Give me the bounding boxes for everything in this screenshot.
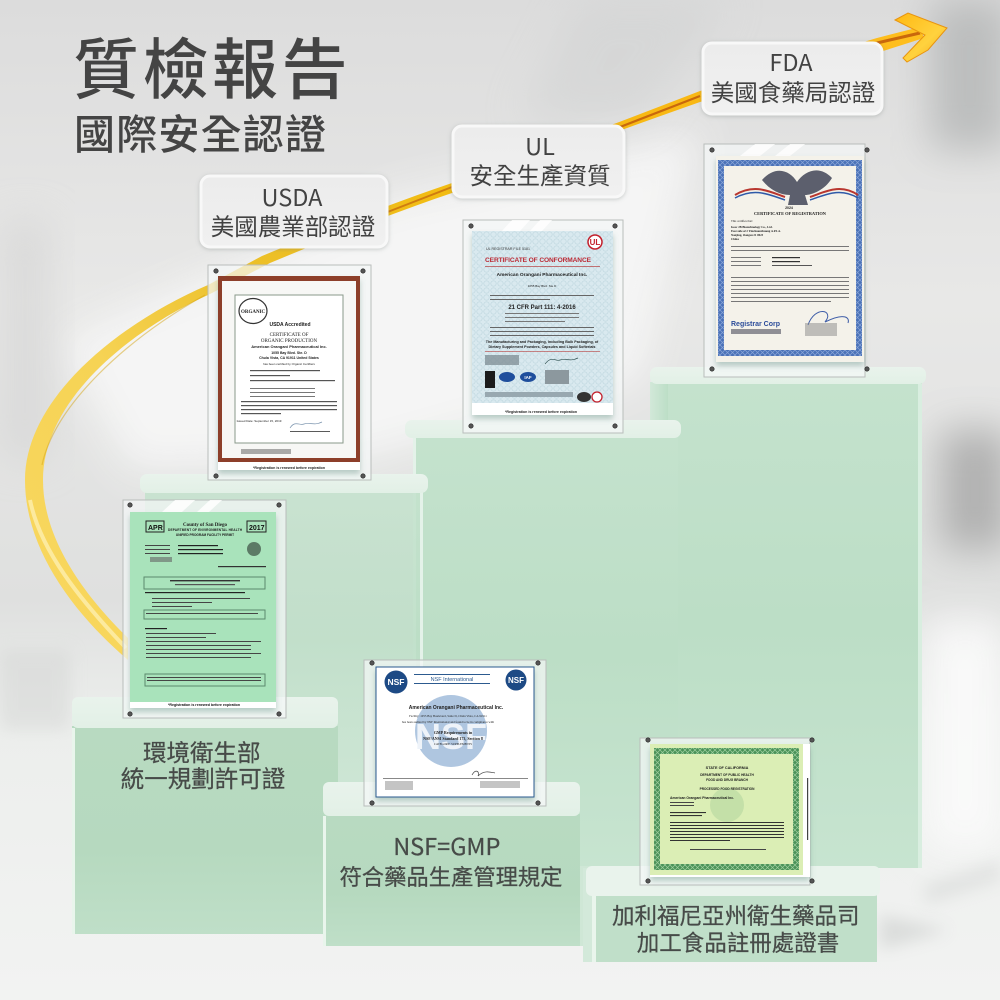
icon: accreditation seals [485, 370, 602, 402]
certificate: NSF GMP: Facility: 1055 Bay Boulevard, Suite D, Chula Vista, CA 91911 [409, 714, 487, 719]
label: USDA: USDA [262, 179, 323, 213]
icon: NSF watermark [415, 695, 487, 767]
certificate: NSF GMP: GMP Requirements in [434, 730, 473, 735]
icon: NSF logo left [384, 670, 408, 694]
label: UL: 安全生產資質 [470, 157, 610, 191]
icon: NSF logo right [506, 670, 526, 690]
certificate: NSF GMP: has been audited by NSF International and found to be in compliance with [402, 720, 495, 724]
certificate: UL: The Manufacturing and Packaging, Including Bulk Packaging, of [486, 340, 599, 344]
label: UL [453, 126, 624, 197]
certificate: FDA registration: Isosc JB Biotechnology Co., Ltd. [731, 225, 773, 229]
icon: NSF watermark: NSF [415, 716, 487, 757]
certificate: UL: Dietary Supplement Powders, Capsules and Liquid Softerials [489, 345, 595, 349]
icon: UL mark: UL [590, 238, 600, 247]
certificate: California food registration: FOOD AND DRUG BRANCH [706, 778, 749, 782]
certificate: NSF GMP: American Orangani Pharmaceutical Inc. [409, 705, 504, 711]
certificate: UL: UL REGISTRAR FILE 5181 [486, 247, 530, 251]
certificate: environmental health permit: County of San Diego [183, 523, 228, 528]
label: FDA [703, 43, 882, 114]
label: USDA: 美國農業部認證 [211, 208, 375, 242]
icon: eagle [735, 170, 858, 205]
label: FDA: 美國食藥局認證 [711, 74, 875, 108]
certificate: USDA organic: 1055 Bay Blvd. Ste. D [271, 351, 307, 355]
certificate: California food registration [640, 738, 810, 885]
certificate: environmental health permit: 2017 [249, 525, 265, 532]
certificate: environmental health permit: DEPARTMENT OF ENVIRONMENTAL HEALTH [168, 528, 243, 532]
golden growth arrow [25, 13, 947, 660]
pedestal: FDA [650, 367, 926, 868]
certificate: FDA registration: Registrar Corp [731, 321, 780, 328]
certificate: FDA registration: CERTIFICATE OF REGISTRATION [754, 211, 827, 216]
certificate: California food registration: STATE OF CALIFORNIA [706, 766, 749, 770]
pedestal: environmental permit [72, 697, 338, 934]
certificate: UL: American Orangani Pharmaceutical Inc. [497, 272, 587, 278]
certificate: FDA registration [704, 144, 865, 377]
certificate: UL [463, 220, 623, 433]
pedestal text: environmental permit: 環境衛生部 [143, 734, 261, 768]
title: 質檢報告 [73, 17, 351, 113]
certificate: USDA organic: has been certified by Organic Certifiers [263, 362, 315, 366]
certificate: FDA registration: 2024 [785, 206, 793, 210]
pedestal text: environmental permit: 統一規劃許可證 [121, 760, 285, 794]
pedestal: UL [405, 420, 681, 946]
mounting screws [128, 148, 869, 883]
certificate: UL: 1055 Bay Blvd. Ste D [528, 284, 557, 288]
certificate: California food registration: PROCESSED FOOD REGISTRATION [700, 787, 755, 791]
icon: organic seal [239, 298, 267, 324]
certificate: California food registration: DEPARTMENT OF PUBLIC HEALTH [700, 773, 754, 777]
certificate: FDA registration: This certifies that: [731, 219, 753, 223]
certificate: USDA organic [208, 265, 371, 480]
certificate: NSF GMP: NSF/ANSI Standard 173, Section 8 [423, 736, 483, 741]
label: FDA: FDA [769, 44, 813, 78]
certificate: NSF GMP: CATEGORY: SUPPLEMENTS [434, 742, 472, 746]
icon: NSF logo right: NSF [508, 676, 524, 685]
icon: UL mark [588, 235, 602, 249]
icon: NSF logo left: NSF [388, 677, 404, 687]
pedestal text: California: 加工食品註冊處證書 [637, 926, 839, 958]
pedestal text: California: 加利福尼亞州衛生藥品司 [612, 899, 860, 931]
certificate: USDA organic: ORGANIC PRODUCTION [261, 339, 318, 344]
certificate: NSF GMP [364, 660, 546, 806]
certificate: UL: *Registration is renewed before expiration [505, 410, 577, 414]
certificate: environmental health permit: APR [148, 525, 163, 532]
certificate: USDA organic: *Registration is renewed before expiration [253, 466, 325, 470]
certificate: environmental health permit: *Registration is renewed before expiration [168, 703, 240, 707]
certificate: UL: 21 CFR Part 111: 4-2016 [508, 305, 576, 311]
certificate: USDA organic: Chula Vista, CA 91911 United States [259, 356, 319, 360]
label: UL: UL [525, 128, 555, 162]
icon: organic seal: ORGANIC [241, 310, 266, 315]
pedestal: NSF [323, 782, 580, 946]
certificate: USDA organic: USDA Accredited [269, 322, 311, 328]
subtitle: 國際安全認證 [74, 101, 327, 161]
certificate: UL: CERTIFICATE OF CONFORMANCE [485, 257, 592, 264]
label: USDA [201, 176, 387, 247]
certificate: NSF GMP: NSF International [431, 677, 473, 683]
certificate: environmental health permit [123, 500, 286, 718]
certificate: FDA registration: East side of 2 Yinchuanzhuang A.P.I.A. [731, 229, 781, 233]
certificate: USDA organic: Issued Date: September 15, 2019 [237, 419, 282, 423]
pedestal: California [583, 866, 880, 962]
pedestal text: NSF GMP: 符合藥品生產管理規定 [340, 860, 562, 892]
certificate: USDA organic: CERTIFICATE OF [270, 333, 309, 338]
certificate: California food registration: American Orangani Pharmaceutical Inc. [670, 796, 734, 800]
pedestal text: NSF GMP: NSF=GMP [393, 828, 500, 862]
pedestal: USDA [140, 474, 428, 791]
certificate: FDA registration: Nanjing, Jiangsu 21 0023 [731, 233, 764, 237]
certificate: USDA organic: American Orangani Pharmaceutical Inc. [251, 344, 327, 349]
icon: accreditation seals: IAF [524, 375, 532, 380]
certificate: FDA registration: China [731, 237, 739, 241]
certificate: environmental health permit: UNIFIED PROGRAM FACILITY PERMIT [176, 533, 234, 537]
